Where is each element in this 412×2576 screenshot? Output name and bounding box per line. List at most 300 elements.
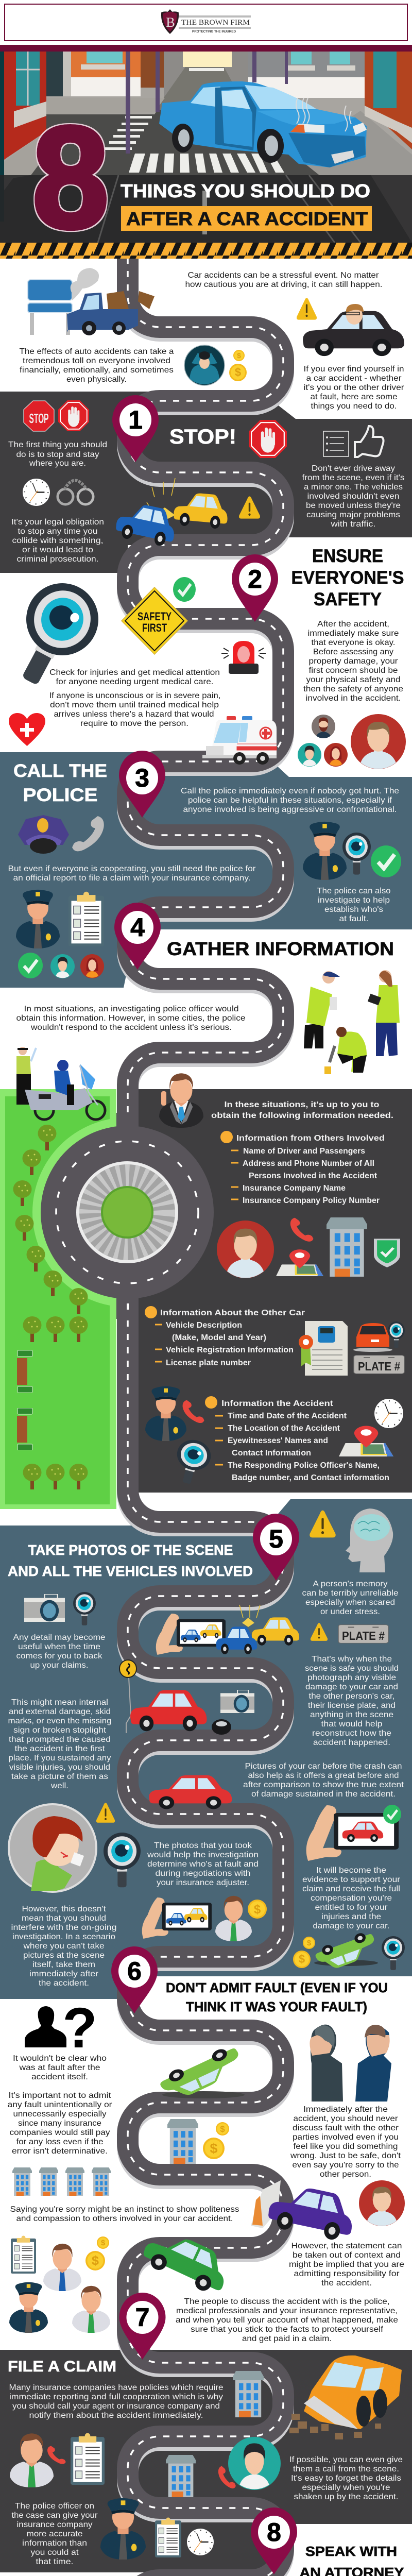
text: however statement: the accident. [321,2279,372,2287]
heading: don't admit fault: DON'T ADMIT FAULT (EVEN IF YOU [166,1980,388,1995]
text: if possible: shaken up by the accident. [294,2493,399,2501]
text: check for injuries: for anyone needing urgent medical care. [56,677,213,686]
text: saying sorry [10,2205,239,2223]
icon: clock and handcuffs [23,479,93,506]
text: however: interfere with the on-going [11,1923,117,1932]
text: if you find yourself [304,365,404,411]
text: never discuss fault: other person. [320,2170,371,2179]
text: police can investigate: investigate to help [318,896,390,905]
pin 5 [253,1514,299,1581]
text: this might mean: well. [50,1782,68,1790]
text: people to discuss: medical professionals and your insurance representative, [176,2307,398,2315]
icon: orange crashed car with rubble [289,2355,402,2439]
text: effects: The effects of auto accidents can take a [20,347,174,356]
text: many insurance companies: notify them about the accident immediately. [29,2411,203,2420]
icon: checklist and thumbs up [323,426,383,457]
text: important not to admit: It's important not to admit [8,2091,111,2100]
text: that's why: photograph any visible [307,1673,396,1682]
icon: police cap [18,815,69,854]
list: the accident: Time and Date of the Accident [228,1412,347,1420]
text: memory: A person's memory [313,1580,387,1588]
text: photos help investigation: your insurance adjuster. [157,1878,249,1887]
icon: stop signs: STOP [29,411,48,426]
heading: ensure everyone's safety: EVERYONE'S [291,568,404,588]
list: other car [145,1306,305,1367]
text: that's why: their license plate, and [308,1701,396,1710]
icon: building and coins: $ [220,2124,225,2134]
text: in these situations: obtain the following information needed. [211,1111,393,1120]
text: however: the accident. [39,1979,89,1988]
heading: take photos [8,1542,253,1579]
text: first thing: where you are. [29,459,86,468]
text: evidence: claim and receive the full [302,1885,400,1893]
pin 8: 8 [267,2518,281,2547]
icon: purple car hitting barrier [251,2180,358,2243]
icon: coins, flipped car, magnifier [293,1929,405,1974]
text: police can investigate [317,887,391,923]
text: many insurance companies: immediate reporting and full cooperation which is why [9,2393,223,2401]
text: this might mean: visible injuries, you should [9,1763,110,1772]
pin 4 [114,903,161,970]
pin 1: 1 [128,405,143,434]
pin 2 [232,554,278,622]
list: other car: Vehicle Registration Information [166,1346,294,1354]
text: after the accident: property damage, your [309,657,398,666]
icon: heart with cross [9,713,45,746]
text: police officer on the case: insurance company [16,2520,93,2529]
text: investigating officer: wouldn't respond to the accident unless it's serious. [30,1023,232,1032]
list: information from others [220,1131,385,1205]
heading: take photos: TAKE PHOTOS OF THE SCENE [28,1542,233,1558]
text: official report [8,865,256,883]
text: first thing: do is to stop and stay [16,450,99,459]
list: information from others: Address and Phone Number of All [243,1159,374,1168]
icon: row of buildings [12,2167,111,2196]
text: important not to admit [7,2091,112,2156]
text: wouldn't be clear: It wouldn't be clear who [13,2054,107,2063]
text: that's why: that would help [321,1720,383,1728]
text: any detail: useful when the time [18,1642,100,1651]
heading: call the police: POLICE [23,785,98,805]
text: however statement: However, the statement can [291,2242,402,2250]
text: check for injuries: If anyone is unconscious or is in severe pain, [49,691,220,700]
icon: warning triangle [239,496,260,519]
icon: building and coins: $ [210,2141,218,2156]
text: any detail: Any detail may become [13,1633,106,1642]
text: never discuss fault: wrong. Just to be safe, don't [290,2151,401,2160]
heading: take photos: AND ALL THE VEHICLES INVOLVED [8,1563,253,1579]
text: people to discuss: The people to discuss the accident with is the police, [184,2297,389,2306]
text: in these situations [211,1100,393,1120]
text: people to discuss: and get paid in a claim. [242,2334,332,2343]
text: many insurance companies: Many insurance companies have policies which require [9,2383,224,2392]
icon: coins: $ [237,351,241,360]
icon: winding road sign [119,1660,136,1733]
text: however: where you can't take [23,1942,105,1951]
text: photos help investigation: determine who's at fault and [147,1860,259,1869]
text: people to discuss [176,2297,398,2343]
pin 6 [111,1946,158,2013]
text: legal obligation: to stop any time you [18,527,98,536]
text: any detail: up your claims. [30,1661,89,1670]
heading: call the police [13,761,107,805]
text: however statement [289,2242,404,2287]
text: pictures before [243,1762,404,1799]
text: never discuss fault: Immediately after the [303,2105,388,2114]
icon: motorcycle police [16,1047,105,1120]
text: that's why: anything in the scene [310,1710,393,1719]
logo: The Brown Firm: THE BROWN FIRM [181,19,250,27]
title: AFTER A CAR ACCIDENT [126,208,368,229]
list: other car: License plate number [166,1359,251,1367]
text: call the police immediately: Call the police immediately even if nobody got hurt. The [181,787,399,795]
text: however: mean that you should [22,1914,106,1923]
text: wouldn't be clear [13,2054,107,2081]
text: if possible: It's easy to forget the details [291,2474,401,2483]
icon: man phoning with clipboard [10,2433,105,2487]
icon: camera and magnifier [24,1592,96,1625]
icon: coins: $ [235,366,241,379]
text: if you find yourself: a car accident - whether [306,374,402,383]
icon: building and coins [167,2119,229,2164]
hero illustration [0,52,412,243]
icon: officer and clipboard [16,890,104,948]
text: call the police immediately: police can be helpful in these situations, especially if [188,796,392,805]
pin 4: 4 [130,913,145,942]
list: information from others: Name of Driver and Passengers [243,1147,365,1156]
icon: clipboard, doctor, coins, officer, man: $ [92,2253,99,2268]
text: evidence: evidence to support your [302,1875,401,1884]
text: legal obligation [11,518,104,564]
icon: red hatchback [149,1775,232,1809]
text: if possible [289,2455,403,2501]
title: THINGS YOU SHOULD DO [121,180,370,201]
icon: coins [229,350,247,381]
text: evidence [302,1866,401,1930]
list: the accident: Contact Information [232,1449,311,1458]
text: do not drive away: a minor one. The vehicles [304,483,403,492]
icon: officer, magnifier, check [303,822,401,880]
text: this might mean: sign or broken stoplight [13,1726,107,1735]
icon: ambulance [202,716,277,765]
icon: safety first sign: FIRST [142,621,167,634]
text: after the accident: then the safety of anyone [303,685,403,693]
text: memory: especially when scared [305,1598,395,1607]
list: other car: (Make, Model and Year) [172,1333,266,1342]
text: effects [20,347,174,384]
text: legal obligation: It's your legal obligation [11,518,104,527]
text: investigating officer: obtain this information. However, in some cities, the police [16,1014,246,1023]
icon: warning triangle [297,298,317,320]
text: that's why: damage to your car and [305,1683,398,1691]
icon: silhouette and question mark: ? [62,1996,97,2060]
text: however: itself, take them [32,1960,95,1969]
text: memory: can be terribly unreliable [302,1589,399,1598]
text: do not drive away: causing major problems [306,511,400,519]
text: that's why: accident happened. [313,1738,390,1747]
icon: building [233,2371,264,2417]
text: important not to admit: for any loss even if the [16,2138,104,2146]
roundabout and park [32,1113,230,1319]
heading: speak with an attorney [300,2544,404,2576]
text: call the police immediately: anyone involved is being aggressive or confrontational. [183,805,397,814]
text: effects: tremendous toll on everyone involved [23,357,170,365]
text: any detail: comes for you to back [16,1652,103,1660]
text: never discuss fault: accident, you should never [294,2114,398,2123]
icon: injured boy portrait [9,1804,96,1892]
heading: ensure everyone's safety: ENSURE [312,546,383,566]
text: after the accident [303,620,403,703]
text: however: pictures at the scene [23,1951,105,1960]
icon: tablet, adjuster, coin [142,1896,267,1941]
list: information from others: Insurance Company Name [243,1184,346,1193]
icon: safety first sign: SAFETY [138,610,171,623]
logo: The Brown Firm: B [166,15,175,30]
pin 8 [251,2507,297,2574]
list: information from others: Insurance Company Policy Number [243,1196,380,1205]
pin 5: 5 [269,1524,283,1553]
text: important not to admit: unnecessarily especially [13,2110,106,2119]
icon: officer, phone, magnifier [145,1386,214,1487]
list: the accident [205,1396,389,1482]
icon: license plate [354,1355,404,1374]
icon: truck crash with sign [28,268,154,335]
text: however statement: might be implied that you are [289,2260,404,2269]
text: after the accident: first concern should be [309,666,398,675]
text: in these situations: In these situations, it's up to you to [225,1100,380,1109]
text: after the accident: involved in the accident. [306,694,401,703]
logo: The Brown Firm [161,9,251,34]
text: if possible: If possible, you can even give [289,2455,403,2464]
text: police can investigate: The police can also [317,887,391,895]
icon: tablet showing red car [306,1805,401,1861]
list: information from others: Persons Involved in the Accident [249,1172,377,1180]
text: evidence: entitled to for your [315,1903,388,1912]
text: if possible: them a call from the scene. [293,2465,399,2473]
icon: warning and plate [311,1623,388,1643]
text: first thing [8,440,107,468]
icon: two men from behind [310,2025,391,2102]
text: do not drive away [302,464,405,529]
icon: stop hand sign [249,420,287,458]
pin 6: 6 [127,1957,142,1986]
icon: tablet, adjuster, coin: $ [254,1903,261,1917]
title [121,180,372,231]
text: if you find yourself: it's you or the other driver [304,383,404,392]
text: after the accident: immediately make sure [308,629,399,638]
text: legal obligation: collide with something, [12,536,103,545]
text: important not to admit: since many insurance [18,2119,101,2128]
text: that's why: the other person's car, [309,1692,394,1701]
text: do not drive away: from the scene, even if it's [302,473,405,482]
text: police officer on the case: that time. [36,2557,73,2566]
text: never discuss fault: parties involved even if you [293,2133,399,2142]
icon: green crashed car [139,2224,235,2298]
text: memory: or under stress. [320,1607,380,1616]
icon: investigators [304,970,400,1074]
text: legal obligation: or it would lead to [22,546,93,554]
text: photos help investigation [147,1841,259,1887]
text: investigating officer: In most situations, an investigating police officer would [24,1005,239,1013]
text: however: immediately after [29,1970,99,1978]
icon: check and avatars [18,953,104,978]
heading: ensure everyone's safety [291,546,404,609]
icon: man in suit pointing [159,1073,203,1128]
icon: coins, flipped car, magnifier: $ [307,1939,312,1947]
text: check for injuries: Check for injuries and get medical attention [49,668,220,677]
text: this might mean: the accident in the first [14,1744,105,1753]
icon: driver in black car [303,304,404,356]
text: investigating officer [16,1005,246,1032]
crashed blue car [159,81,367,167]
icon: coins, flipped car, magnifier: $ [299,1953,305,1965]
icon: avatars group [298,714,406,769]
text: police officer on the case [11,2502,98,2566]
text: saying sorry: Saying you're sorry might be an instinct to show politeness [10,2205,239,2214]
text: police officer on the case: the case can give your [11,2511,98,2520]
text: effects: even physically. [66,375,127,384]
text: this might mean: This might mean internal [11,1698,108,1707]
list: the accident: The Location of the Accident [228,1424,340,1433]
text: after the accident: that everyone is okay. [311,638,396,647]
text: never discuss fault: even say you're sorry to the [293,2161,399,2170]
icon: registration document [299,1321,348,1376]
text: never discuss fault: feel like you did something [294,2142,398,2151]
text: photos help investigation: The photos that you took [154,1841,252,1850]
text: wouldn't be clear: accident itself. [31,2073,88,2081]
intro text [185,271,382,289]
text: however: However, this doesn't [22,1905,106,1913]
text: never discuss fault [290,2105,401,2179]
text: police can investigate: establish who's [324,905,383,914]
icon: clipboard, doctor, coins, officer, man [9,2235,110,2333]
text: call the police immediately [181,787,399,814]
text: evidence: damage to your car. [313,1922,389,1930]
logo: The Brown Firm: PROTECTING THE INJURED [192,30,236,33]
text: official report: an official report to file a claim with your insurance company. [13,874,251,883]
text: this might mean: marks, or even the missing [8,1717,112,1725]
park benches [17,1350,32,1450]
text: people to discuss: and when you tell your account of what happened, make [176,2316,398,2325]
text: check for injuries: require to move the person. [80,719,188,728]
icon: license plate: PLATE # [358,1360,400,1373]
text: if possible: especially when you're [302,2483,390,2492]
header logo panel [5,4,407,41]
pin 3: 3 [135,764,149,792]
list: the accident: Information the Accident [221,1399,333,1408]
text: after the accident: After the accident, [317,620,389,629]
intro text: Car accidents can be a stressful event. No matter [187,271,379,280]
icon: building, phone, teal avatar [166,2437,281,2497]
text: pictures before: of damage sustained in the accident. [251,1790,396,1799]
pin 3 [119,751,165,818]
text: however statement: admitting responsibility for [294,2269,400,2278]
icon: damaged red car, camera, tire [130,1690,254,1735]
text: this might mean: place. If you sustained any [8,1754,111,1762]
icon: green check [173,577,196,602]
icon: magnifier [104,1833,141,1887]
heading: gather information: GATHER INFORMATION [167,938,394,959]
text: important not to admit: any fault unintentionally or [7,2100,112,2109]
text: check for injuries: arrives unless there's a hazard that would [54,710,214,719]
icon: officer, clipboard, clock [100,2498,214,2560]
icon: silhouette and question mark [25,1996,97,2060]
icon: orange car and magnifier [353,1321,405,1352]
text: however [11,1905,117,1988]
pin 7: 7 [135,2303,149,2332]
intro text: how cautious you are at driving, it can still happen. [185,280,382,289]
text: that's why: reconstruct how the [312,1729,391,1738]
text: evidence: It will become the [316,1866,386,1875]
text: important not to admit: companies would still pay [9,2128,110,2137]
text: police officer on the case: information than [22,2539,87,2548]
text: never discuss fault: discuss fault with the other [293,2124,399,2132]
icon: warning triangle [96,1803,115,1823]
text: police officer on the case: more accurate [27,2530,83,2538]
icon: clock and map [339,1399,403,1456]
text: memory [302,1580,399,1616]
heading: call the police: CALL THE [13,761,107,781]
text: pictures before: after comparison to show the true extent [243,1781,404,1789]
text: that's why [305,1655,399,1747]
park trees [13,1125,88,1489]
text: pictures before: Pictures of your car before the crash can [245,1762,402,1771]
icon: flipped green car [157,2043,246,2105]
icon: warning and plate: PLATE # [342,1629,385,1642]
heading: ensure everyone's safety: SAFETY [314,589,382,609]
text: police officer on the case: The police officer on [15,2502,94,2511]
icon: stop signs [24,400,89,431]
text: first thing: The first thing you should [8,440,107,449]
text: photos help investigation: during negotiations with [156,1869,250,1878]
text: evidence: compensation you're [311,1894,392,1903]
text: many insurance companies: you should call your agent or insurance company and [12,2402,220,2411]
text: photos help investigation: would help the investigation [147,1851,259,1859]
text: this might mean: and external damage, skid [9,1707,111,1716]
text: official report: But even if everyone is cooperating, you still need the police for [8,865,256,873]
text: check for injuries [49,668,220,728]
icon: big magnifying glass with eye [0,570,111,698]
list: other car: Vehicle Description [166,1321,242,1330]
text: after the accident: Before assessing any [313,648,393,656]
winding road [128,258,283,2576]
icon: telephone [72,816,104,851]
text: do not drive away: be moved unless they're [306,501,401,510]
list: information from others: Information from Others Involved [236,1134,385,1143]
list: the accident: Badge number, and Contact information [232,1473,389,1482]
text: do not drive away: with traffic. [330,520,376,529]
text: police can investigate: at fault. [339,914,369,923]
text: any detail [13,1633,106,1670]
text: police officer on the case: you could at [31,2548,79,2557]
text: however: investigation. In a scenario [12,1933,115,1941]
heading: file a claim: FILE A CLAIM [8,2358,116,2375]
list: other car: Information About the Other Car [160,1309,305,1317]
pin 1 [112,395,159,462]
list: the accident: Eyewitnesses' Names and [228,1436,328,1445]
heading: speak with an attorney: SPEAK WITH [305,2544,397,2559]
pin 2: 2 [248,565,262,594]
text: do not drive away: involved shouldn't even [307,492,400,501]
icon: warning and head with brain [310,1509,393,1572]
text: that's why: That's why when the [312,1655,392,1664]
text: legal obligation: criminal prosecution. [16,555,99,564]
hazard stripe [0,243,412,259]
text: that's why: scene is safe you should [305,1664,399,1673]
icon: safety first sign [122,587,187,654]
text: do not drive away: Don't ever drive away [312,464,395,473]
text: effects: financially, emotionally, and sometimes [20,366,174,375]
